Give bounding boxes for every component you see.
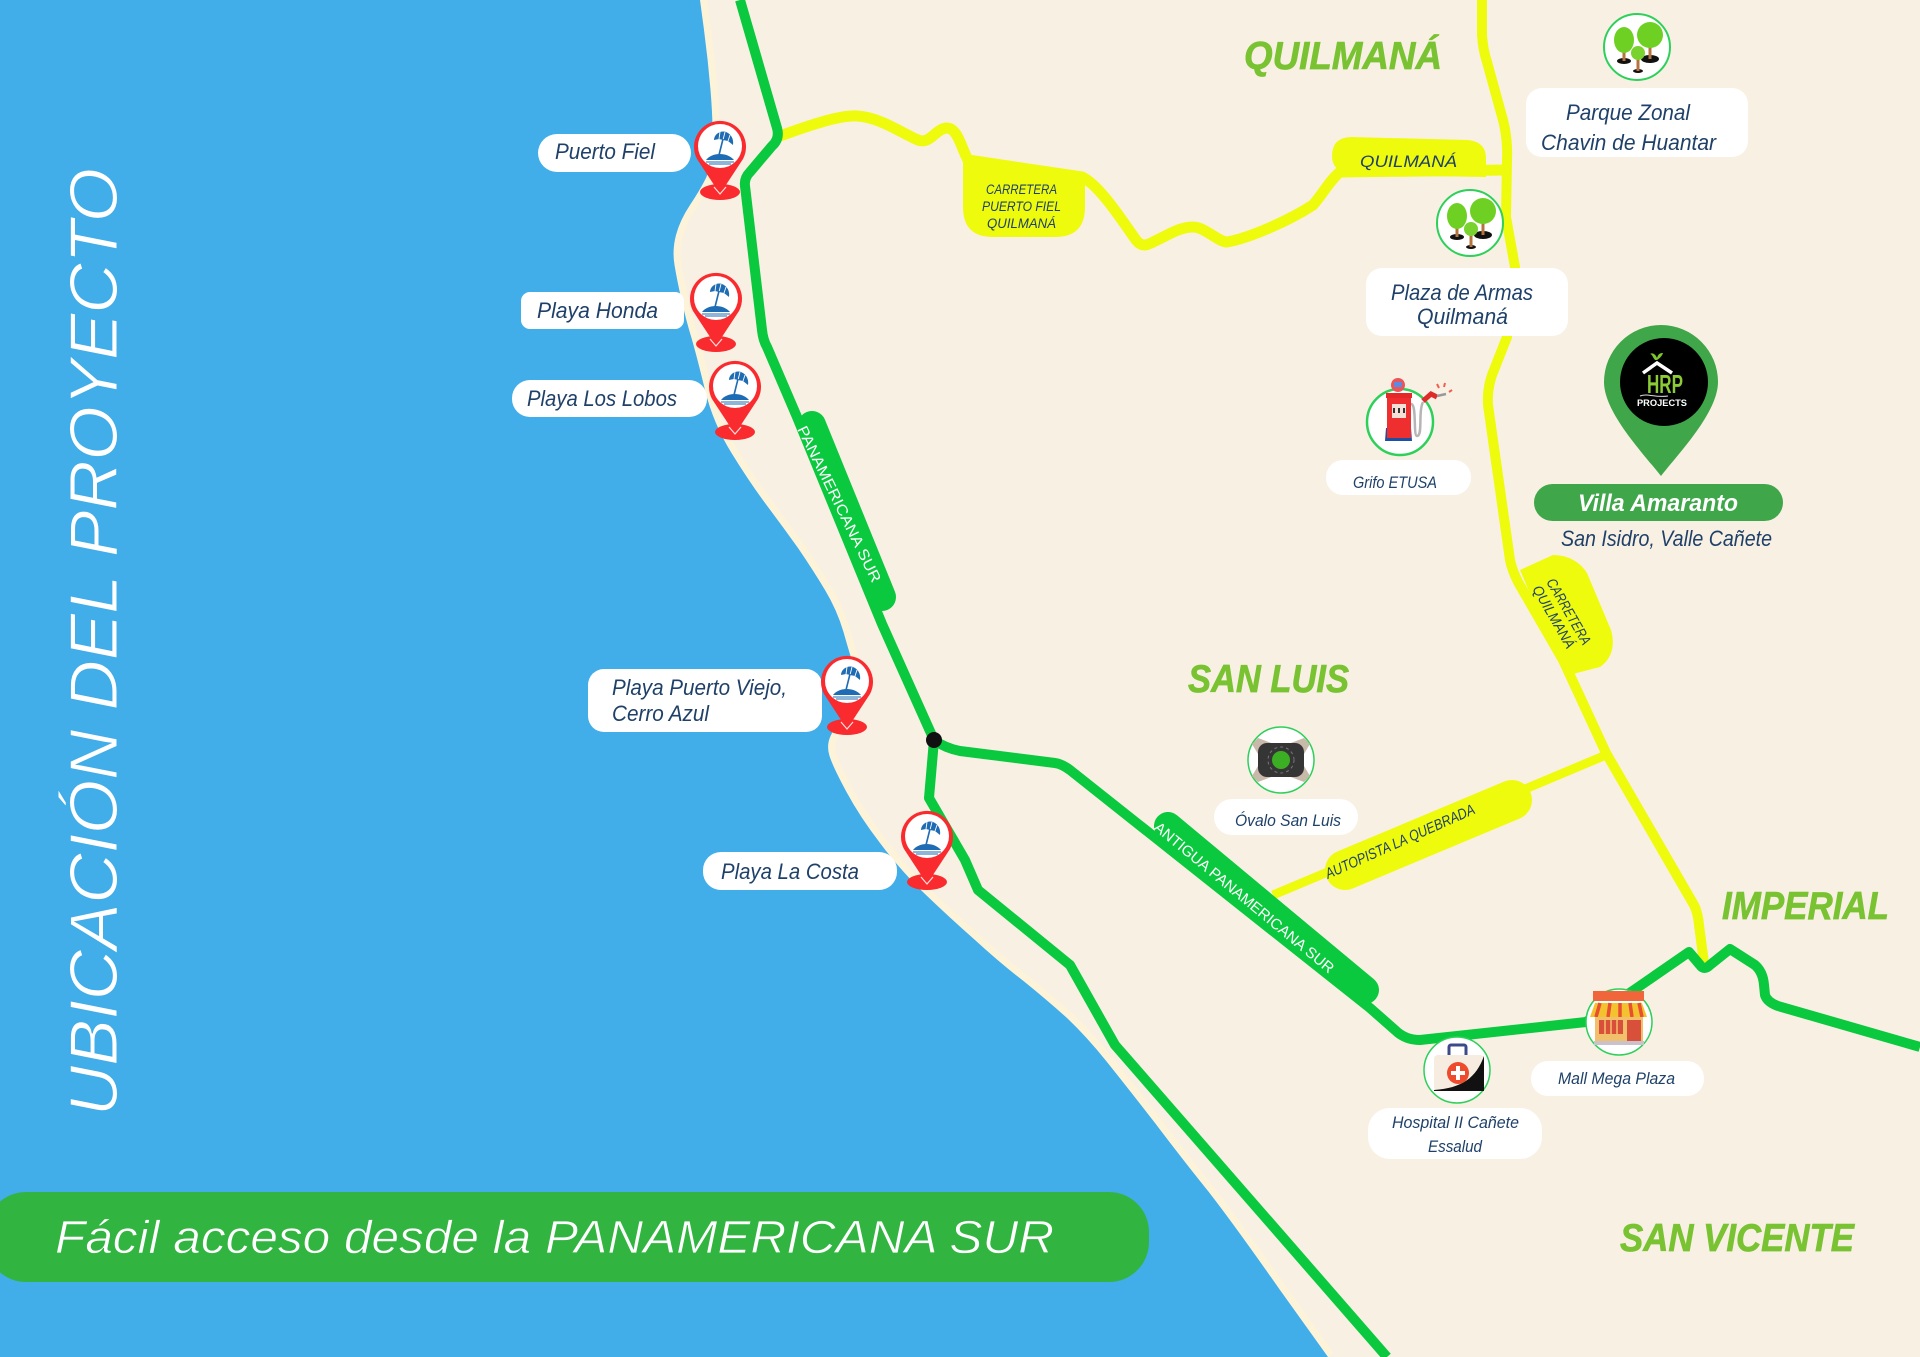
road: Antigua Panamericana green [934, 740, 1920, 1047]
district: Imperial: IMPERIAL [1722, 885, 1889, 928]
place: Plaza de Armas [1366, 190, 1568, 336]
banner [0, 1192, 1149, 1282]
place: Plaza de Armas: Quilmaná [1417, 304, 1508, 329]
place: Mall Mega Plaza [1531, 989, 1704, 1096]
road label: Carretera Quilmaná: CARRETERA [1543, 576, 1593, 648]
beach: Playa Puerto Viejo, Cerro Azul [588, 656, 873, 735]
junction dot [926, 732, 942, 748]
beach: Playa Los Lobos [512, 361, 761, 440]
road: carretera Puerto Fiel yellow [780, 116, 1506, 245]
road label: Carretera Quilmaná: QUILMANÁ [1529, 582, 1578, 652]
place: Parque Zonal: Parque Zonal [1566, 100, 1691, 125]
beach: Puerto Fiel [538, 121, 746, 200]
beach: Playa Honda [521, 273, 742, 352]
place: Grifo ETUSA: Grifo ETUSA [1353, 473, 1437, 492]
place: Hospital II Cañete Essalud: Hospital II Cañete [1392, 1113, 1519, 1132]
road label: Carretera Puerto Fiel Quilmaná: QUILMANÁ [987, 216, 1056, 231]
beach: Playa La Costa: Playa La Costa [721, 859, 859, 884]
road label: Carretera Puerto Fiel Quilmaná: PUERTO FIEL [982, 199, 1061, 214]
beach: Playa La Costa [703, 811, 953, 890]
place: Hospital II Cañete Essalud: Essalud [1428, 1137, 1482, 1156]
road label: Carretera Quilmaná [1520, 555, 1613, 676]
place: Mall Mega Plaza: Mall Mega Plaza [1558, 1069, 1675, 1088]
road label: Panamericana Sur: PANAMERICANA SUR [793, 423, 884, 586]
road label: Carretera Puerto Fiel Quilmaná: CARRETERA [986, 182, 1057, 197]
road: carretera Quilmaná yellow [1482, 0, 1704, 963]
road label: Quilmaná [1332, 137, 1486, 177]
road: autopista yellow [1273, 755, 1606, 895]
vertical title: UBICACIÓN DEL PROYECTO [56, 168, 132, 1116]
place: Grifo ETUSA [1326, 378, 1471, 495]
place: Parque Zonal [1526, 14, 1748, 157]
place: Óvalo San Luis: Óvalo San Luis [1235, 811, 1341, 830]
project pin: Villa Amaranto: HRP [1647, 369, 1683, 399]
district: Quilmaná: QUILMANÁ [1244, 34, 1442, 78]
place: Hospital II Cañete Essalud [1368, 1037, 1542, 1159]
project pin: Villa Amaranto [1534, 325, 1783, 551]
banner: Fácil acceso desde la PANAMERICANA SUR [55, 1211, 1054, 1263]
place: Óvalo San Luis [1214, 727, 1358, 835]
beach: Playa Puerto Viejo, Cerro Azul: Cerro Azul [612, 701, 710, 726]
place: Parque Zonal: Chavin de Huantar [1541, 130, 1718, 155]
place: Plaza de Armas: Plaza de Armas [1391, 280, 1533, 305]
beach: Playa Los Lobos: Playa Los Lobos [527, 386, 677, 411]
beach: Playa Honda: Playa Honda [537, 298, 658, 323]
road label: Antigua Panamericana Sur: ANTIGUA PANAMERICANA SUR [1150, 819, 1337, 977]
road label: Autopista La Quebrada: AUTOPISTA LA QUEBRADA [1322, 801, 1478, 883]
project pin: Villa Amaranto: PROJECTS [1637, 398, 1687, 408]
beach: Playa Puerto Viejo, Cerro Azul: Playa Puerto Viejo, [612, 675, 787, 700]
road label: Carretera Puerto Fiel Quilmaná [963, 155, 1085, 237]
project pin: Villa Amaranto: San Isidro, Valle Cañete [1561, 526, 1772, 551]
project pin: Villa Amaranto: Villa Amaranto [1578, 490, 1738, 517]
coastline sand [674, 0, 1328, 1357]
road label: Quilmaná: QUILMANÁ [1360, 152, 1457, 171]
beach: Puerto Fiel: Puerto Fiel [555, 139, 656, 164]
district: San Vicente: SAN VICENTE [1620, 1217, 1855, 1260]
sea [0, 0, 1328, 1357]
road: Panamericana Sur green [740, 0, 1387, 1357]
district: San Luis: SAN LUIS [1188, 658, 1349, 701]
